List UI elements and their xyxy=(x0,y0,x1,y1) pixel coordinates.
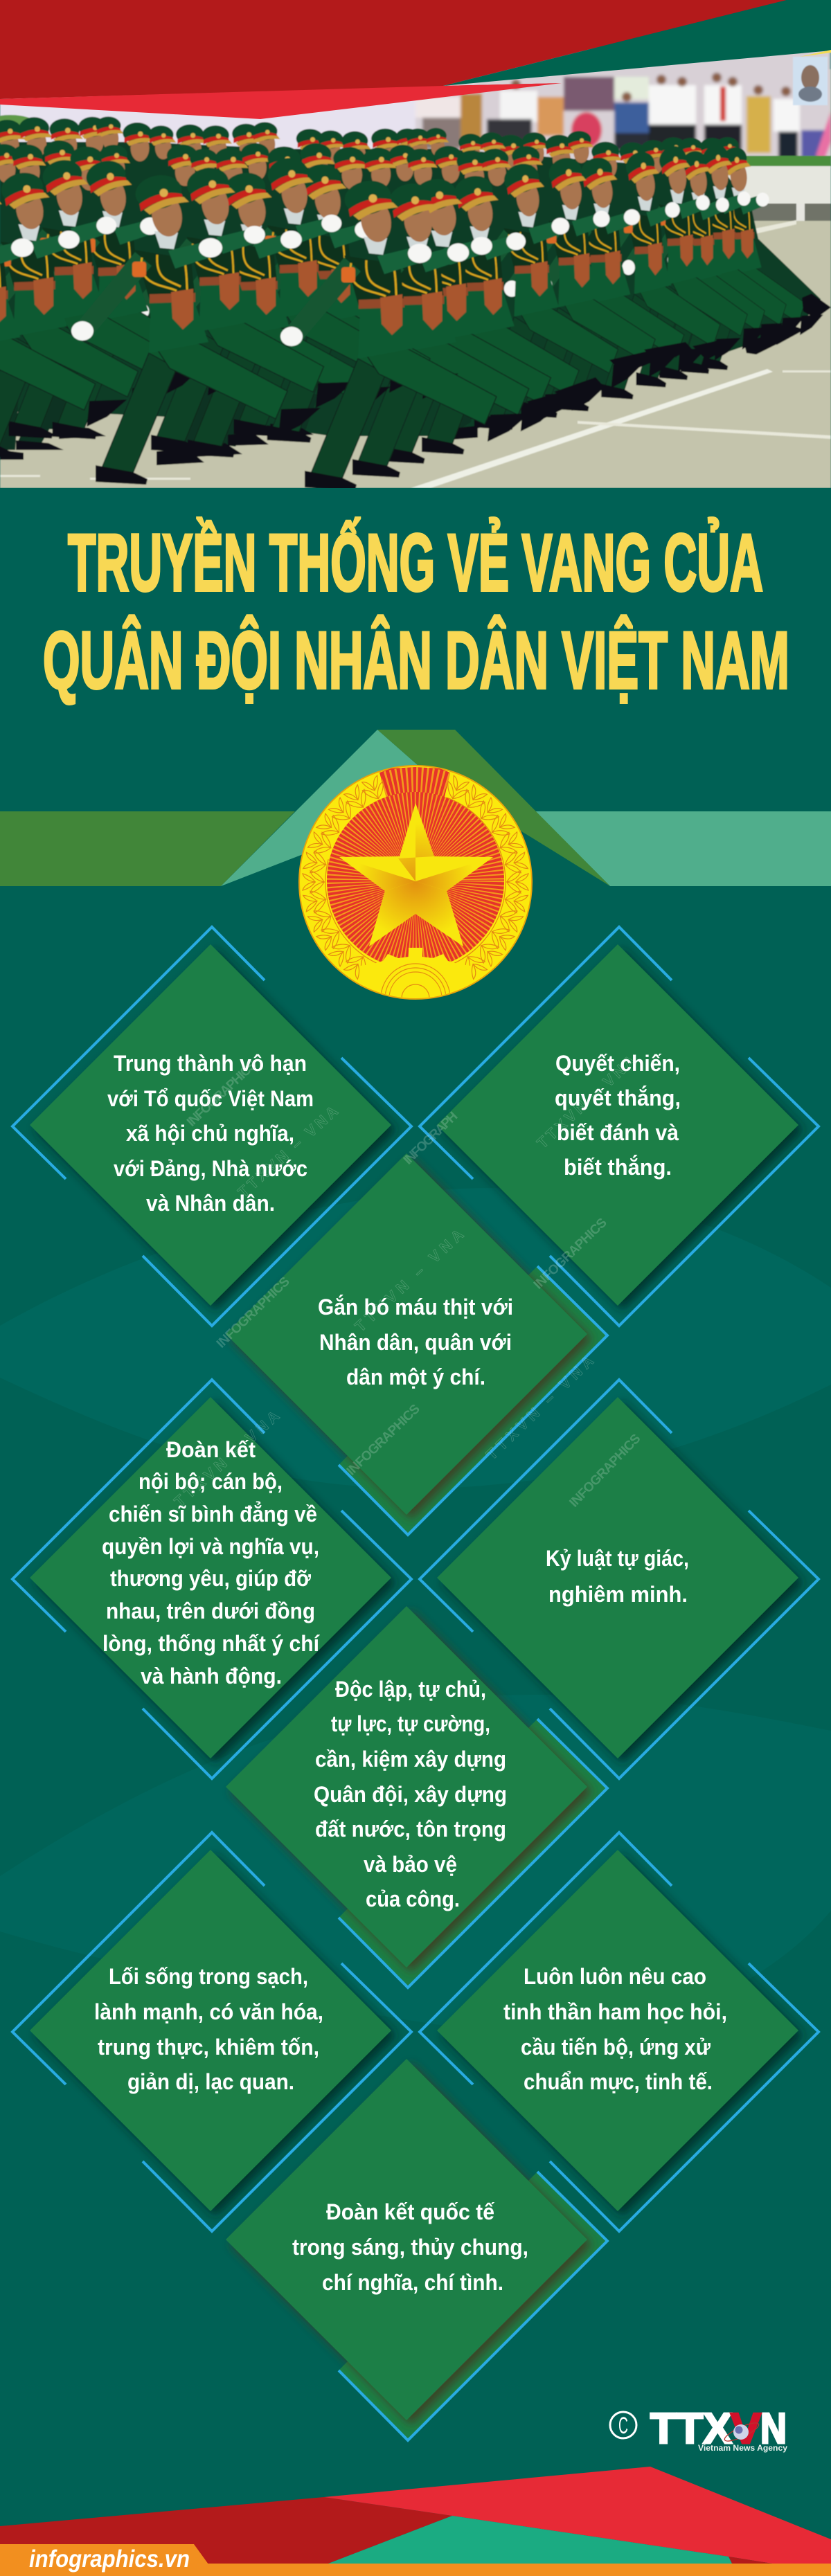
panel: Lối sống xyxy=(12,1832,411,2231)
watermarks: INFOGRAPHICS xyxy=(214,1275,293,1351)
panel: Luôn luôn: Luôn luôn nêu cao xyxy=(524,1964,706,1989)
panel: Đoàn kết nội bộ: Đoàn kết xyxy=(166,1437,256,1462)
panel: Lối sống: lành mạnh, có văn hóa, xyxy=(94,1999,323,2024)
watermarks: TTXVN – VNA xyxy=(533,1052,639,1152)
panel: Đoàn kết quốc tế: Đoàn kết quốc tế xyxy=(326,2199,494,2224)
panel: Kỷ luật: Kỷ luật tự giác, xyxy=(546,1546,689,1571)
watermarks: TTXVN – VNA xyxy=(235,1102,341,1201)
panel: Lối sống: Lối sống trong sạch, xyxy=(109,1964,308,1989)
panel: Đoàn kết quốc tế: chí nghĩa, chí tình. xyxy=(322,2270,503,2295)
panel: Kỷ luật xyxy=(420,1380,819,1778)
panel: Luôn luôn: chuẩn mực, tinh tế. xyxy=(524,2069,713,2094)
massed uniforms xyxy=(0,142,821,436)
panel: Lối sống: giản dị, lạc quan. xyxy=(127,2069,294,2094)
panel: Đoàn kết nội bộ: quyền lợi và nghĩa vụ, xyxy=(102,1534,319,1559)
marching soldiers, right to left xyxy=(0,141,823,490)
panel: Luôn luôn: tinh thần ham học hỏi, xyxy=(503,1999,727,2024)
panel: Đoàn kết quốc tế: trong sáng, thủy chung, xyxy=(292,2235,528,2260)
logo: TTXVN: TTX xyxy=(650,2405,732,2453)
emblem star xyxy=(339,803,493,946)
header green xyxy=(443,0,831,86)
logo: TTXVN: N xyxy=(760,2405,787,2453)
panel: Quyết chiến xyxy=(420,927,819,1326)
panel: Quyết chiến: Quyết chiến, xyxy=(555,1051,680,1076)
logo: TTXVN: V xyxy=(731,2405,761,2453)
panel: Đoàn kết nội bộ: lòng, thống nhất ý chí xyxy=(102,1631,320,1656)
panel: Độc lập xyxy=(226,1606,607,1988)
portrait sign in the crowd xyxy=(793,57,828,105)
emblem xyxy=(298,765,533,1000)
panel: Độc lập: và bảo vệ xyxy=(364,1852,457,1877)
raised boots at the end of the line xyxy=(526,294,831,414)
title xyxy=(43,517,789,705)
copyright mark xyxy=(610,2412,636,2439)
header bright red xyxy=(0,83,562,119)
panel: Đoàn kết nội bộ xyxy=(12,1380,411,1778)
emblem wreath xyxy=(302,775,529,980)
header dark red xyxy=(0,0,787,99)
panel: Đoàn kết nội bộ: và hành động. xyxy=(141,1664,282,1688)
panel: Đoàn kết nội bộ: nhau, trên dưới đồng xyxy=(106,1598,315,1623)
watermarks: INFOGRAPHICS xyxy=(344,1402,423,1479)
panel: Quyết chiến: biết đánh và xyxy=(557,1120,679,1145)
panel: Gắn bó: Nhân dân, quân với xyxy=(319,1330,512,1355)
panel: Quyết chiến: quyết thắng, xyxy=(555,1086,681,1110)
panel: Trung thành: và Nhân dân. xyxy=(146,1191,275,1216)
watermarks: TTXVN – VNA xyxy=(483,1352,597,1463)
ribbon band behind the emblem xyxy=(0,730,831,886)
panel: Độc lập: cần, kiệm xây dựng xyxy=(315,1747,506,1772)
back legs with shoes xyxy=(0,388,479,466)
watermarks: TTXVN – VNA xyxy=(351,1225,467,1335)
panel: Độc lập: tự lực, tự cường, xyxy=(331,1711,490,1736)
panel: Gắn bó: Gắn bó máu thịt với xyxy=(318,1295,513,1319)
watermarks: INFOGRAPH xyxy=(401,1109,461,1168)
road markings xyxy=(0,220,831,488)
photo backdrop xyxy=(0,97,417,150)
watermarks: TTXVN – VNA xyxy=(171,1407,283,1511)
panel: Quyết chiến: biết thắng. xyxy=(564,1155,672,1180)
panel: Kỷ luật: nghiêm minh. xyxy=(548,1582,688,1607)
panel: Đoàn kết quốc tế xyxy=(226,2059,607,2440)
panel: Trung thành: xã hội chủ nghĩa, xyxy=(126,1121,294,1146)
panel: Đoàn kết nội bộ: thương yêu, giúp đỡ xyxy=(110,1566,311,1591)
watermarks: INFOGRAPHICS xyxy=(184,1058,260,1130)
panel: Độc lập: Quân đội, xây dựng xyxy=(314,1782,507,1807)
panel: Độc lập: đất nước, tôn trọng xyxy=(315,1817,506,1841)
panel: Trung thành: Trung thành vô hạn xyxy=(114,1051,307,1076)
watermarks: INFOGRAPHICS xyxy=(531,1216,610,1292)
panel: Lối sống: trung thực, khiêm tốn, xyxy=(98,2035,319,2060)
back rows of caps xyxy=(0,116,741,191)
panel: Gắn bó: dân một ý chí. xyxy=(346,1364,485,1389)
panel: Trung thành: với Đảng, Nhà nước xyxy=(114,1156,307,1181)
background swooshes xyxy=(0,1188,831,2037)
header shapes xyxy=(0,0,831,119)
panel: Đoàn kết nội bộ: chiến sĩ bình đẳng về xyxy=(109,1502,317,1526)
emblem gear xyxy=(360,948,471,997)
footer shapes xyxy=(0,2467,831,2576)
crowd in the stands xyxy=(416,48,831,166)
watermarks xyxy=(171,1052,643,1511)
panel: Luôn luôn xyxy=(420,1832,819,2231)
panel: Trung thành: với Tổ quốc Việt Nam xyxy=(107,1086,314,1111)
panel: Đoàn kết nội bộ: nội bộ; cán bộ, xyxy=(138,1469,283,1494)
panel: Gắn bó xyxy=(226,1153,607,1535)
source: infographics.vn: infographics.vn xyxy=(29,2546,190,2573)
watermarks: INFOGRAPHICS xyxy=(566,1432,643,1510)
logo: TTXVN: Vietnam News Agency xyxy=(698,2443,787,2453)
panel: Luôn luôn: cầu tiến bộ, ứng xử xyxy=(521,2035,711,2060)
emblem red sunburst xyxy=(327,767,504,962)
photo: marching soldiers xyxy=(0,48,831,490)
logo: TTXVN xyxy=(610,2405,787,2453)
panel: Trung thành xyxy=(12,927,411,1326)
panel: Độc lập: Độc lập, tự chủ, xyxy=(335,1677,486,1702)
copyright mark: C xyxy=(618,2413,628,2439)
panel: Độc lập: của công. xyxy=(366,1886,460,1911)
